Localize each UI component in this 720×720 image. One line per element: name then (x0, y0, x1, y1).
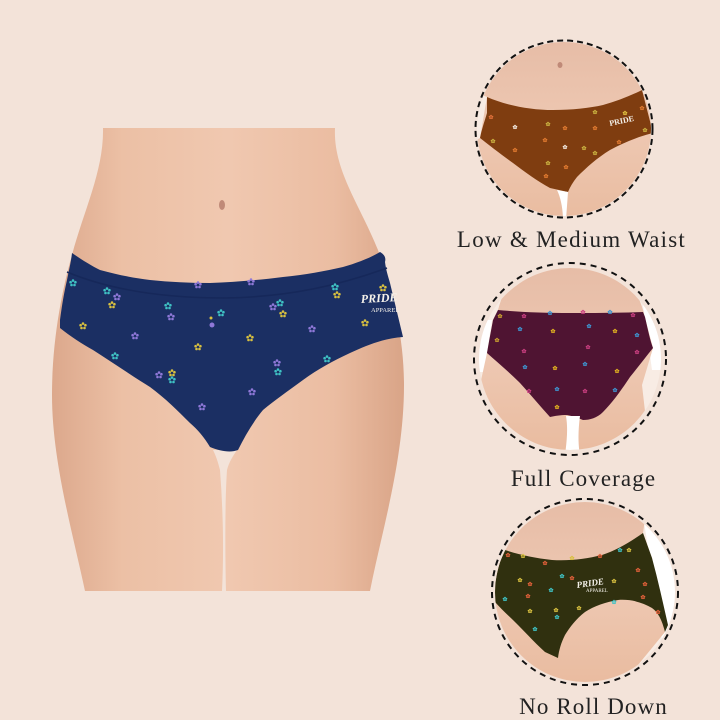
garment waistband seam (67, 268, 387, 298)
maroon garment (487, 310, 653, 420)
skin (478, 42, 651, 216)
label: low and medium waist: Low & Medium Waist (457, 227, 686, 252)
dashed ring (492, 499, 678, 685)
circle 1: low and medium waist (474, 40, 654, 218)
model figure (52, 128, 404, 591)
main product photo: navy floral brief (52, 128, 404, 591)
navel (219, 200, 225, 210)
label: full coverage: Full Coverage (511, 466, 656, 491)
circle 3: no roll down (490, 497, 680, 687)
dashed ring (474, 263, 666, 455)
garment logo subtext: APPAREL (371, 307, 399, 314)
navy garment (60, 252, 403, 451)
circle 2: full coverage (474, 263, 666, 455)
print (503, 548, 660, 631)
garment logo: PRIDE (360, 290, 398, 306)
skin (490, 497, 665, 687)
leg gap (566, 416, 580, 450)
brown garment (480, 90, 653, 192)
dashed ring (476, 40, 652, 218)
floral print (69, 278, 387, 410)
navel (558, 62, 562, 68)
print (489, 106, 647, 178)
white backdrop left (478, 320, 492, 372)
white backdrop right (643, 305, 661, 370)
olive garment (495, 533, 668, 658)
label: no roll down: No Roll Down (519, 694, 668, 719)
garment logo: PRIDE (609, 114, 635, 128)
skin (480, 264, 653, 455)
leg gap (557, 190, 568, 216)
white backdrop (644, 524, 675, 639)
garment logo: PRIDE (576, 576, 605, 590)
garment logo subtext: APPAREL (586, 589, 608, 594)
print (495, 310, 639, 409)
